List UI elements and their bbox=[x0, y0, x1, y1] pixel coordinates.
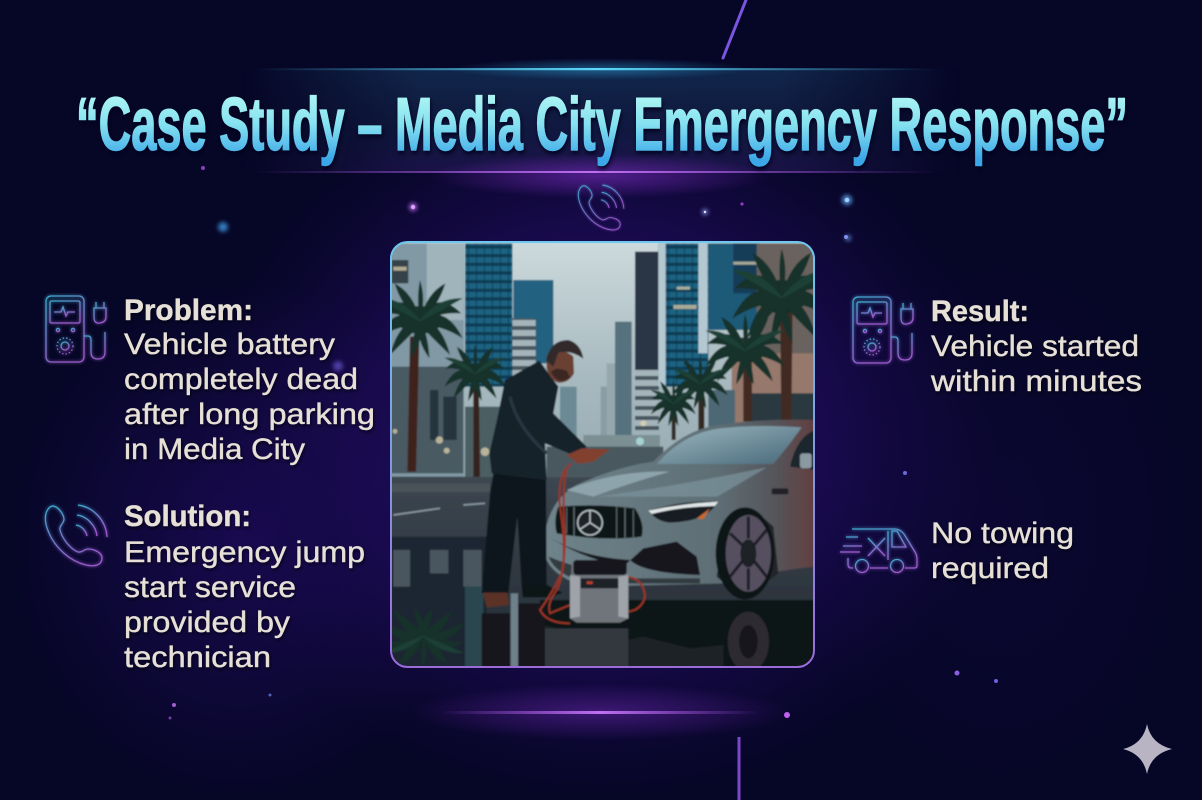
text: solution: Emergency jump bbox=[124, 536, 365, 569]
photo frame bbox=[391, 242, 814, 667]
text: problem: completely dead bbox=[124, 363, 358, 396]
text: result: Result: bbox=[931, 295, 1029, 328]
text: result: within minutes bbox=[930, 365, 1142, 398]
text: no towing: No towing bbox=[931, 517, 1074, 550]
text: solution: provided by bbox=[124, 606, 290, 639]
text: solution: start service bbox=[124, 571, 296, 604]
icon: sparkle watermark bbox=[1123, 724, 1172, 774]
icon: left battery tester bbox=[46, 296, 106, 362]
text: no towing bbox=[931, 517, 1074, 585]
text: result: Vehicle started bbox=[931, 330, 1139, 363]
streak lines bbox=[440, 0, 760, 800]
icon: right battery tester bbox=[853, 297, 913, 363]
sky bbox=[402, 243, 804, 478]
particles bbox=[168, 166, 998, 720]
icon: top phone bbox=[578, 185, 624, 230]
text: problem bbox=[124, 294, 375, 466]
text: solution: Solution: bbox=[124, 500, 251, 533]
window lights bbox=[393, 262, 757, 456]
icon: tow van crossed out bbox=[840, 529, 917, 572]
text: problem: in Media City bbox=[124, 433, 305, 466]
text: no towing: required bbox=[931, 552, 1049, 585]
wet road bbox=[383, 477, 815, 672]
text: solution bbox=[124, 500, 365, 674]
title band bbox=[240, 58, 960, 198]
text: result bbox=[930, 295, 1142, 398]
text: problem: after long parking bbox=[124, 398, 375, 431]
text: problem: Problem: bbox=[124, 294, 253, 327]
car bbox=[545, 420, 815, 600]
jump cables bbox=[540, 463, 645, 623]
city buildings bbox=[390, 243, 815, 480]
technician bbox=[482, 340, 610, 607]
text: problem: Vehicle battery bbox=[124, 328, 335, 361]
jump starter pack bbox=[570, 560, 628, 623]
icon: left phone bbox=[45, 505, 107, 566]
photo: technician jump-starting car bbox=[377, 240, 831, 672]
palm trees bbox=[377, 249, 831, 478]
text: solution: technician bbox=[124, 641, 271, 674]
